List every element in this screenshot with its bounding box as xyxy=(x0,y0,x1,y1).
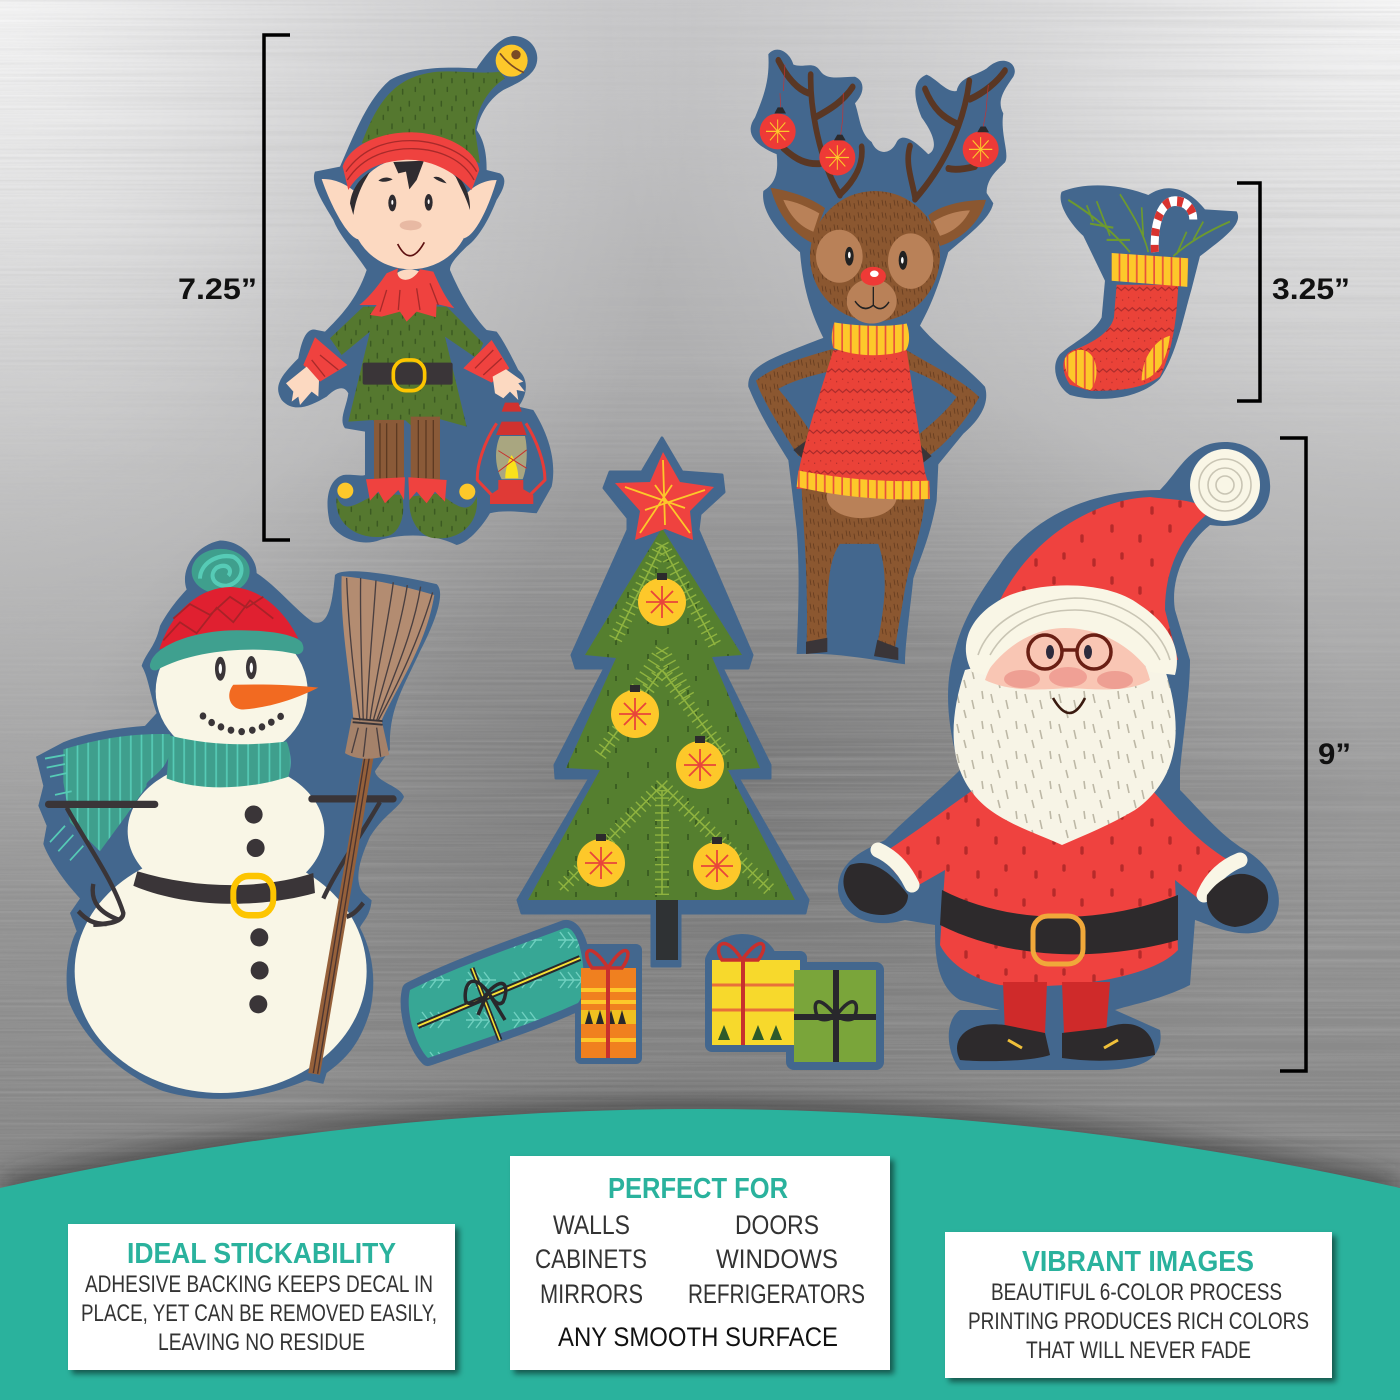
antlers xyxy=(778,60,1005,199)
card: ideal stickability: LEAVING NO RESIDUE xyxy=(158,1329,365,1356)
legs xyxy=(802,489,925,648)
star xyxy=(615,452,714,540)
card: perfect for: ANY SMOOTH SURFACE xyxy=(558,1322,838,1352)
card: vibrant images: VIBRANT IMAGES xyxy=(1022,1246,1254,1278)
card: vibrant images: PRINTING PRODUCES RICH COLORS xyxy=(968,1308,1309,1335)
trunk xyxy=(656,895,678,960)
hat xyxy=(1000,497,1212,660)
ears xyxy=(322,179,497,239)
boots xyxy=(957,1024,1155,1061)
card: perfect for: WINDOWS xyxy=(716,1244,838,1274)
sweater xyxy=(797,350,930,489)
beard xyxy=(954,662,1176,845)
pom-pom xyxy=(192,549,250,594)
card: vibrant images: BEAUTIFUL 6-COLOR PROCESS xyxy=(991,1279,1282,1306)
card: perfect for: REFRIGERATORS xyxy=(688,1279,865,1309)
coat xyxy=(880,782,1228,986)
decal: snowman xyxy=(36,540,440,1099)
card: vibrant images xyxy=(945,1232,1332,1378)
decal: christmas tree xyxy=(518,438,808,966)
card: vibrant images: THAT WILL NEVER FADE xyxy=(1026,1337,1251,1364)
boots xyxy=(336,477,477,538)
legs xyxy=(374,417,440,480)
decal: reindeer xyxy=(748,50,1238,664)
orange gift xyxy=(581,951,636,1058)
legs xyxy=(1003,982,1110,1034)
dimension bracket: 7.25 inches: 7.25” xyxy=(178,273,257,306)
belt and buckle xyxy=(940,890,1178,964)
dimension bracket: 7.25 inches xyxy=(178,35,290,540)
card: perfect for: WALLS xyxy=(553,1210,630,1240)
belt and buckle xyxy=(363,360,453,391)
tunic and sleeves xyxy=(330,307,483,435)
teal gift xyxy=(409,928,584,1058)
hat xyxy=(150,587,303,670)
lantern xyxy=(477,403,545,504)
collar xyxy=(359,268,454,322)
sock xyxy=(1063,285,1178,391)
antler baubles xyxy=(760,64,999,175)
cuffs xyxy=(878,850,1240,895)
boot buckles xyxy=(1008,1040,1118,1048)
tree foliage xyxy=(528,528,795,900)
ears xyxy=(771,188,986,246)
eyes, brows, nose and smile xyxy=(378,177,447,256)
hair xyxy=(350,161,470,215)
mittens xyxy=(843,863,1268,927)
green gift xyxy=(794,970,876,1062)
dimension bracket: 9 inches: 9” xyxy=(1318,738,1351,771)
dimension bracket: 3.25 inches: 3.25” xyxy=(1272,273,1350,306)
teal footer band xyxy=(0,1101,1400,1400)
yellow gift xyxy=(712,944,800,1045)
face xyxy=(200,656,318,735)
dimension bracket: 3.25 inches xyxy=(1237,183,1350,401)
head xyxy=(810,191,940,322)
card: ideal stickability xyxy=(68,1224,455,1370)
face xyxy=(351,157,470,269)
body xyxy=(75,622,367,1093)
card: ideal stickability: ADHESIVE BACKING KEEPS DECAL IN xyxy=(85,1271,433,1298)
belt and buckle xyxy=(133,871,315,915)
decal: yellow gift and green gift xyxy=(712,941,876,1062)
ornaments xyxy=(577,573,741,890)
buttons xyxy=(245,805,269,1013)
broom xyxy=(308,576,434,1075)
tree branches xyxy=(560,545,770,895)
card: perfect for: CABINETS xyxy=(535,1244,647,1274)
decal: stocking xyxy=(1055,185,1238,399)
scarf xyxy=(45,734,291,860)
candy cane xyxy=(1155,201,1193,252)
decal: teal gift and orange gift xyxy=(409,928,636,1058)
hat brim xyxy=(966,585,1177,675)
card: perfect for: DOORS xyxy=(735,1210,819,1240)
card: ideal stickability: IDEAL STICKABILITY xyxy=(127,1238,396,1270)
dimension bracket: 9 inches xyxy=(1280,438,1351,1071)
card: perfect for xyxy=(510,1156,890,1370)
pine sprigs xyxy=(1068,194,1230,256)
pom-pom xyxy=(1190,449,1260,521)
headband xyxy=(343,132,479,190)
arms xyxy=(756,349,979,456)
hat xyxy=(362,71,505,163)
face xyxy=(985,625,1150,713)
arms xyxy=(48,799,393,925)
cuff, toe and heel xyxy=(1065,253,1188,390)
decal: elf xyxy=(278,36,553,545)
card: perfect for: PERFECT FOR xyxy=(608,1173,788,1205)
decal: santa xyxy=(838,442,1279,1070)
collar and hem xyxy=(797,322,930,500)
bell xyxy=(496,45,528,77)
card: perfect for: MIRRORS xyxy=(540,1279,643,1309)
eye patches, eyes and snout xyxy=(816,230,933,324)
card: ideal stickability: PLACE, YET CAN BE REMOVED EASILY, xyxy=(81,1300,437,1327)
cuffs and hands xyxy=(286,337,525,405)
hooves and hands xyxy=(793,438,932,660)
